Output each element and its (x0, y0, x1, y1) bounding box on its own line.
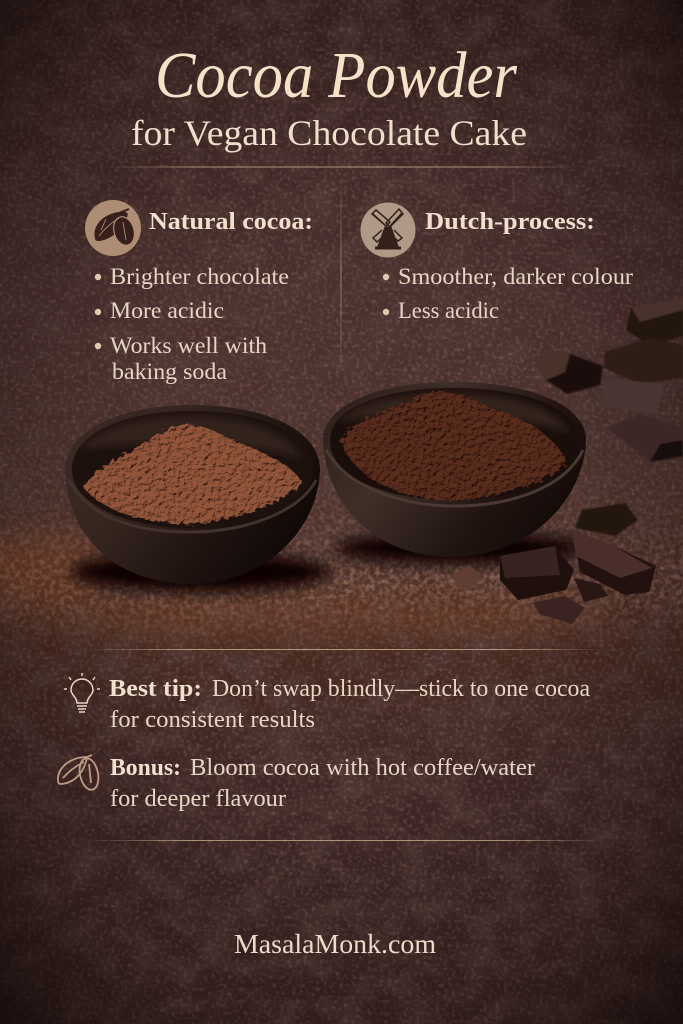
bullet list: dutch-process (383, 264, 633, 324)
bullet list: natural cocoa: baking soda (112, 359, 228, 385)
heading: dutch-process: Dutch-process: (425, 209, 595, 235)
title: Cocoa Powder (155, 39, 517, 112)
callout: bonus: Bloom cocoa with hot coffee/water (190, 755, 535, 781)
callout: bonus: for deeper flavour (110, 786, 286, 812)
bullet list: natural cocoa (95, 264, 289, 385)
bullet list: natural cocoa: Brighter chocolate (110, 264, 289, 290)
subtitle: for Vegan Chocolate Cake (131, 113, 527, 153)
photo: right bowl of dutch-process cocoa (323, 382, 586, 564)
icon: cocoa pods badge (85, 200, 141, 256)
panel: dutch-process (360, 202, 633, 324)
photo: scattered chocolate chunks, upper right (533, 298, 683, 462)
bullet list: natural cocoa: Works well with (110, 333, 267, 359)
footer: website: MasalaMonk.com (234, 928, 436, 959)
text: bonus: Bonus: (110, 754, 181, 781)
bullet list: dutch-process: Smoother, darker colour (398, 264, 633, 290)
bullet list: natural cocoa: More acidic (110, 298, 224, 324)
bullet list: dutch-process: Less acidic (398, 298, 499, 324)
icon: light bulb (64, 673, 100, 712)
callout: bonus (58, 754, 535, 812)
icon: cocoa pods outline (58, 755, 101, 792)
photo: left bowl of natural cocoa (65, 405, 330, 592)
photo: chocolate chunks, lower right (452, 503, 656, 624)
callout: best tip: for consistent results (110, 707, 315, 733)
heading: natural cocoa: Natural cocoa: (149, 209, 313, 235)
icon: windmill badge (360, 202, 416, 258)
panel: natural cocoa (85, 200, 313, 385)
text: best tip: Best tip: (109, 675, 202, 702)
callout: best tip: Don’t swap blindly—stick to one cocoa (212, 676, 590, 702)
callout: best tip (64, 673, 590, 733)
